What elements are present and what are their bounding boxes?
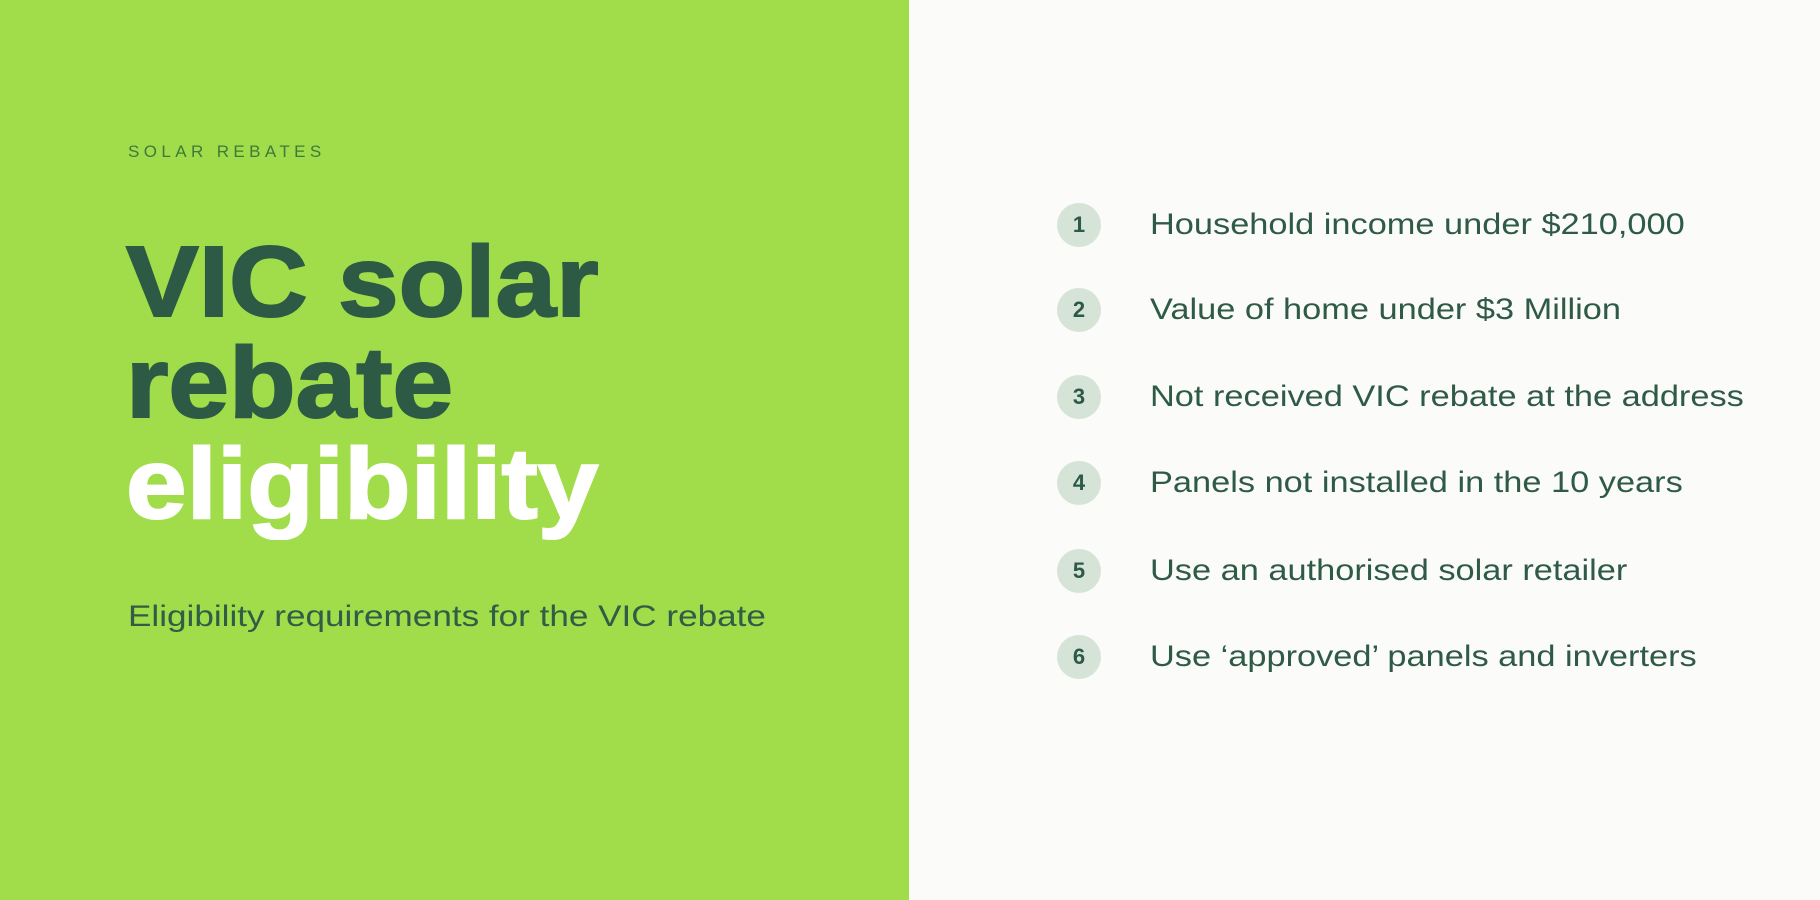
item 3: 3 bbox=[1073, 384, 1085, 409]
item 1: Household income under $210,000 bbox=[1150, 208, 1685, 241]
panel: left green bbox=[0, 0, 909, 900]
item 5 bbox=[1057, 549, 1627, 593]
item 5: 5 bbox=[1073, 558, 1085, 583]
item 6 bbox=[1057, 635, 1697, 679]
item 2 bbox=[1057, 288, 1621, 332]
item 4: 4 bbox=[1073, 470, 1085, 495]
item 6: 6 bbox=[1073, 644, 1085, 669]
item 3: Not received VIC rebate at the address bbox=[1150, 380, 1744, 413]
item 6: Use ‘approved’ panels and inverters bbox=[1150, 640, 1697, 673]
item 1: 1 bbox=[1073, 212, 1085, 237]
item 5: Use an authorised solar retailer bbox=[1150, 554, 1627, 587]
kicker: SOLAR REBATES bbox=[128, 142, 326, 161]
item 1 bbox=[1057, 203, 1685, 247]
title: eligibility bbox=[126, 428, 598, 540]
title: VIC solar bbox=[126, 226, 599, 338]
title: rebate bbox=[126, 327, 453, 439]
item 2: 2 bbox=[1073, 297, 1085, 322]
item 4 bbox=[1057, 461, 1683, 505]
title bbox=[125, 226, 600, 540]
subtitle: Eligibility requirements for the VIC rebate bbox=[128, 600, 766, 633]
item 4: Panels not installed in the 10 years bbox=[1150, 466, 1683, 499]
item 3 bbox=[1057, 375, 1744, 419]
item 2: Value of home under $3 Million bbox=[1150, 293, 1621, 326]
